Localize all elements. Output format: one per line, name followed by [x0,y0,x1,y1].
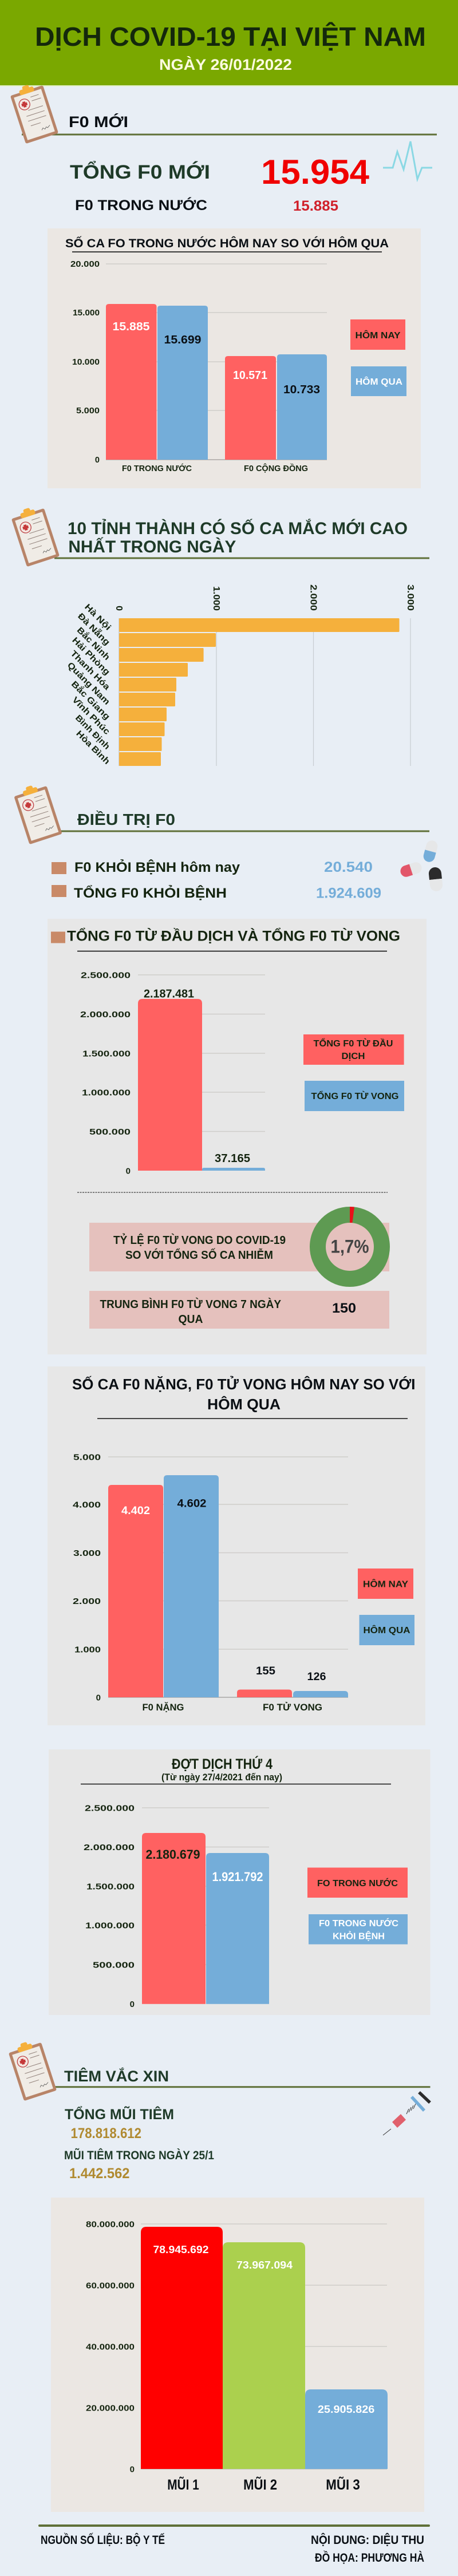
footer [38,2524,430,2565]
stat row: recovered today: F0 KHỎI BỆNH hôm nay [74,859,240,875]
bar chart: severe and deaths: 0 [96,1693,101,1702]
callout: 7-day average deaths [89,1291,389,1329]
bar chart: severe and deaths: 4.000 [73,1500,101,1510]
panel heading: SỐ CA F0 NẶNG, F0 TỬ VONG HÔM NAY SO VỚI [72,1375,416,1393]
bar chart: severe and deaths: F0 TỬ VONG [263,1702,322,1713]
bar chart: total cases vs deaths: 500.000 [89,1127,131,1137]
bar chart: severe and deaths: 3.000 [73,1548,101,1558]
section: F0 mới [9,80,437,214]
donut chart: 1,7% [318,1207,382,1279]
bar chart: severe and deaths: 4.602 [177,1498,206,1510]
bar chart: doses: 25.905.826 [318,2404,374,2415]
bar chart: fourth wave: 1.921.792 [212,1870,263,1884]
bar chart: doses: MŨI 1 [167,2476,199,2493]
bar chart: domestic and community cases: F0 CỘNG ĐỒNG [244,463,308,473]
panel: fourth wave [49,1749,431,2015]
legend: tổng F0 từ đầu dịch: TỔNG F0 TỪ ĐẦU [314,1038,393,1049]
bar chart: doses: 20.000.000 [86,2403,135,2413]
header banner [0,0,458,86]
horizontal bar chart: provinces: Hòa Bình [74,729,112,767]
callout: 7-day average deaths: QUA [179,1313,203,1326]
bar chart: severe and deaths: 126 [307,1671,326,1683]
bar chart: doses: 73.967.094 [236,2259,293,2271]
legend: hôm qua [351,366,406,396]
bar chart: domestic and community cases: 10.733 [283,384,320,396]
panel: domestic cases today vs yesterday [48,228,421,488]
bar chart: fourth wave: 2.500.000 [85,1803,135,1814]
legend: hôm nay: HÔM NAY [363,1579,408,1589]
stat row: total recovered: 1.924.609 [316,885,381,901]
horizontal bar chart: provinces: Bình Định [73,713,112,752]
callout: death ratio [89,1207,389,1279]
horizontal bar chart: provinces: Bắc Giang [69,679,112,722]
bar chart: total cases vs deaths: 2.187.481 [144,988,194,1001]
legend: F0 trong nước khỏi bệnh: KHỎI BỆNH [333,1930,385,1942]
panel heading with marker: TỔNG F0 TỪ ĐẦU DỊCH VÀ TỔNG F0 TỪ VONG [67,927,400,945]
bar chart: domestic and community cases: 0 [95,456,100,465]
callout: death ratio: TỶ LỆ F0 TỪ VONG DO COVID-19 [113,1233,286,1247]
bar chart: domestic and community cases: 5.000 [76,406,100,416]
stat row: recovered today: 20.540 [324,859,373,875]
legend: tổng F0 từ đầu dịch: DỊCH [341,1052,365,1061]
bar chart: fourth wave: 2.180.679 [145,1847,200,1862]
bar chart: doses: MŨI 3 [326,2476,360,2493]
bar chart: domestic and community cases [70,260,327,473]
label: doses on 25/1: MŨI TIÊM TRONG NGÀY 25/1 [64,2148,214,2162]
label: total doses: TỔNG MŨI TIÊM [65,2105,174,2123]
horizontal bar chart: provinces: Hải Phòng [70,635,112,677]
content credit: NỘI DUNG: DIỆU THU [311,2533,424,2547]
panel heading: HÔM QUA [207,1396,281,1413]
legend: hôm qua [360,1615,414,1645]
bar chart: domestic and community cases: F0 TRONG NƯỚC [122,463,192,473]
horizontal bar chart: provinces: Hà Nội [82,602,113,633]
legend: F0 trong nước [307,1867,408,1898]
value: total new cases: 15.954 [261,153,370,191]
icon: clipboard [13,781,62,844]
date: NGÀY 26/01/2022 [159,56,292,73]
label: F0 trong nước: F0 TRONG NƯỚC [75,196,207,214]
callout: 7-day average deaths: TRUNG BÌNH F0 TỪ VONG 7 NGÀY [100,1297,282,1311]
label: tổng F0 mới: TỔNG F0 MỚI [70,161,210,183]
callout: death ratio: SO VỚI TỔNG SỐ CA NHIỄM [125,1248,273,1262]
section: top 10 provinces [10,503,429,767]
value: doses on 25/1: 1.442.562 [69,2166,129,2182]
bar chart: severe and deaths [73,1453,348,1713]
callout: 7-day average deaths: 150 [332,1301,356,1316]
stat row: recovered today [52,859,373,875]
stat row: total recovered: TỔNG F0 KHỎI BỆNH [74,884,227,901]
section: tiêm vắc xin [7,2037,431,2182]
source credit: NGUỒN SỐ LIỆU: BỘ Y TẾ [41,2533,165,2547]
icon: syringe [383,2092,430,2135]
legend: F0 trong nước khỏi bệnh [309,1914,408,1944]
bar chart: severe and deaths: 155 [256,1665,275,1677]
bar chart: severe and deaths: 4.402 [121,1505,150,1517]
donut chart: 1,7%: 1,7% [331,1236,369,1257]
bar chart: doses: MŨI 2 [243,2476,277,2493]
bar chart: total cases vs deaths: 0 [126,1167,131,1176]
legend: hôm qua: HÔM QUA [363,1625,410,1635]
icon: heartbeat pulse [383,141,432,179]
bar chart: domestic and community cases: 20.000 [70,260,100,269]
bar chart: total cases vs deaths: 1.500.000 [82,1049,131,1059]
value: domestic cases: 15.885 [293,198,338,214]
heading: điều trị F0: ĐIỀU TRỊ F0 [77,811,175,828]
legend: tổng F0 tử vong [305,1081,404,1111]
bar chart: total cases vs deaths [80,971,265,1176]
horizontal bar chart: provinces: Thanh Hóa [69,649,112,692]
bar chart: domestic and community cases: 15.699 [164,334,202,346]
bar chart: fourth wave: 1.000.000 [85,1921,135,1930]
bar chart: domestic and community cases: 15.885 [112,321,150,333]
heading: tiêm vắc xin: TIÊM VẮC XIN [64,2067,169,2085]
bar chart: severe and deaths: 1.000 [74,1645,101,1654]
bar chart: domestic and community cases: 10.571 [233,369,267,382]
horizontal bar chart: provinces [65,584,415,767]
panel: total F0 and deaths [48,919,427,1354]
bar chart: total cases vs deaths: 2.500.000 [81,971,131,980]
horizontal bar chart: provinces: Vĩnh Phúc [70,695,112,737]
icon: clipboard [9,80,58,144]
panel heading: SỐ CA FO TRONG NƯỚC HÔM NAY SO VỚI HÔM QUA [65,236,389,250]
icon: clipboard [10,503,60,567]
graphics credit: ĐỒ HỌA: PHƯƠNG HÀ [315,2551,424,2565]
section: điều trị F0 [13,781,443,901]
bar chart: total cases vs deaths: 1.000.000 [82,1088,131,1098]
bar chart: doses: 60.000.000 [86,2281,135,2291]
horizontal bar chart: provinces: 3.000 [405,584,415,611]
legend: F0 trong nước khỏi bệnh: F0 TRONG NƯỚC [319,1918,398,1929]
bar chart: fourth wave: 1.500.000 [86,1882,135,1891]
stat row: total recovered [52,884,381,901]
bar chart: domestic and community cases: 10.000 [72,358,100,367]
panel: severe and deaths today vs yesterday [48,1366,425,1725]
bar chart: fourth wave: 0 [130,2000,135,2009]
bar chart: doses: 78.945.692 [153,2244,208,2255]
heading: 10 provinces: NHẤT TRONG NGÀY [68,537,236,556]
bar chart: severe and deaths: 5.000 [73,1453,101,1462]
legend: hôm nay [358,1568,413,1599]
panel: vaccine doses [51,2198,424,2512]
bar chart: fourth wave: 2.000.000 [84,1843,135,1852]
horizontal bar chart: provinces: 0 [114,606,124,611]
bar chart: severe and deaths: F0 NẶNG [142,1702,184,1713]
legend: hôm nay [350,319,405,350]
horizontal bar chart: provinces: 2.000 [308,584,318,611]
bar chart: total cases vs deaths: 2.000.000 [80,1010,131,1020]
bar chart: doses: 40.000.000 [86,2342,135,2352]
panel title: ĐỢT DỊCH THỨ 4 [172,1755,273,1772]
icon: capsules [399,839,443,892]
horizontal bar chart: provinces: 1.000 [211,586,221,611]
legend: hôm nay: HÔM NAY [355,330,401,341]
horizontal bar chart: provinces: Bắc Ninh [75,625,112,662]
heading: 10 provinces: 10 TỈNH THÀNH CÓ SỐ CA MẮC MỚI CAO [68,519,408,538]
value: total doses: 178.818.612 [71,2125,141,2142]
bar chart: doses: 80.000.000 [86,2220,135,2229]
panel subtitle: (Từ ngày 27/4/2021 đến nay) [161,1772,282,1783]
legend: tổng F0 tử vong: TỔNG F0 TỪ VONG [311,1091,398,1101]
bar chart: doses: 0 [130,2465,135,2474]
panel heading [72,1375,416,1413]
bar chart: fourth wave [84,1803,269,2009]
horizontal bar chart: provinces: Quảng Nam [65,661,112,707]
bar chart: total cases vs deaths: 37.165 [215,1152,250,1165]
bar chart: fourth wave: 500.000 [93,1960,135,1970]
bar chart: domestic and community cases: 15.000 [73,309,100,318]
icon: clipboard [7,2037,57,2101]
legend: hôm qua: HÔM QUA [356,376,402,387]
title: DỊCH COVID-19 TẠI VIỆT NAM [35,22,426,52]
legend: tổng F0 từ đầu dịch [303,1034,404,1065]
bar chart: severe and deaths: 2.000 [73,1597,101,1606]
bar chart: doses [86,2220,388,2493]
heading: F0 mới: F0 MỚI [69,113,128,131]
horizontal bar chart: provinces: Đà Nẵng [76,611,112,647]
legend: F0 trong nước: FO TRONG NƯỚC [317,1878,398,1888]
